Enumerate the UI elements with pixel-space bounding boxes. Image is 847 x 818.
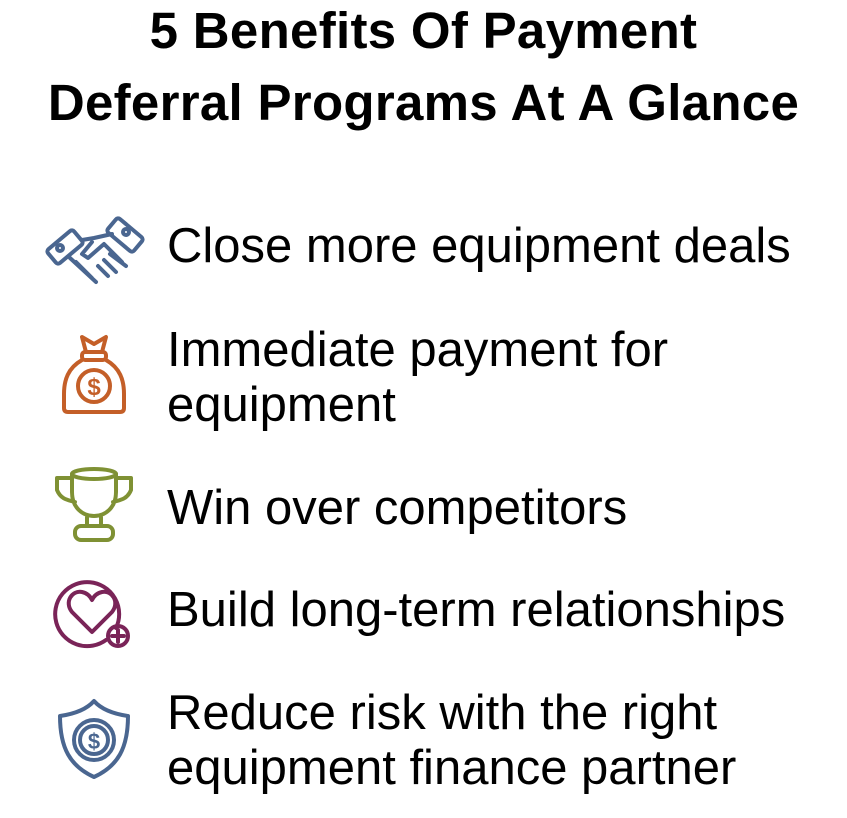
text: item 3: Win over competitors bbox=[167, 481, 627, 535]
text: item 2: equipment bbox=[167, 378, 396, 432]
icon: money bag bbox=[62, 334, 126, 414]
text: item 2 bbox=[167, 323, 668, 432]
text: item 5: Reduce risk with the right bbox=[167, 686, 717, 740]
text: item 5: equipment finance partner bbox=[167, 741, 736, 795]
icon: handshake bbox=[45, 216, 145, 284]
title: Deferral Programs At A Glance bbox=[48, 74, 799, 131]
icon: shield: $ bbox=[88, 729, 100, 754]
text: item 1: Close more equipment deals bbox=[167, 219, 791, 273]
icon: shield bbox=[58, 698, 130, 779]
icon: heart plus bbox=[53, 580, 130, 648]
text: item 4: Build long-term relationships bbox=[167, 583, 785, 637]
title bbox=[48, 2, 799, 131]
icon: trophy bbox=[55, 467, 133, 542]
text: item 5 bbox=[167, 686, 736, 795]
text: item 2: Immediate payment for bbox=[167, 323, 668, 377]
title: 5 Benefits Of Payment bbox=[150, 2, 697, 59]
icon: money bag: $ bbox=[87, 374, 101, 401]
